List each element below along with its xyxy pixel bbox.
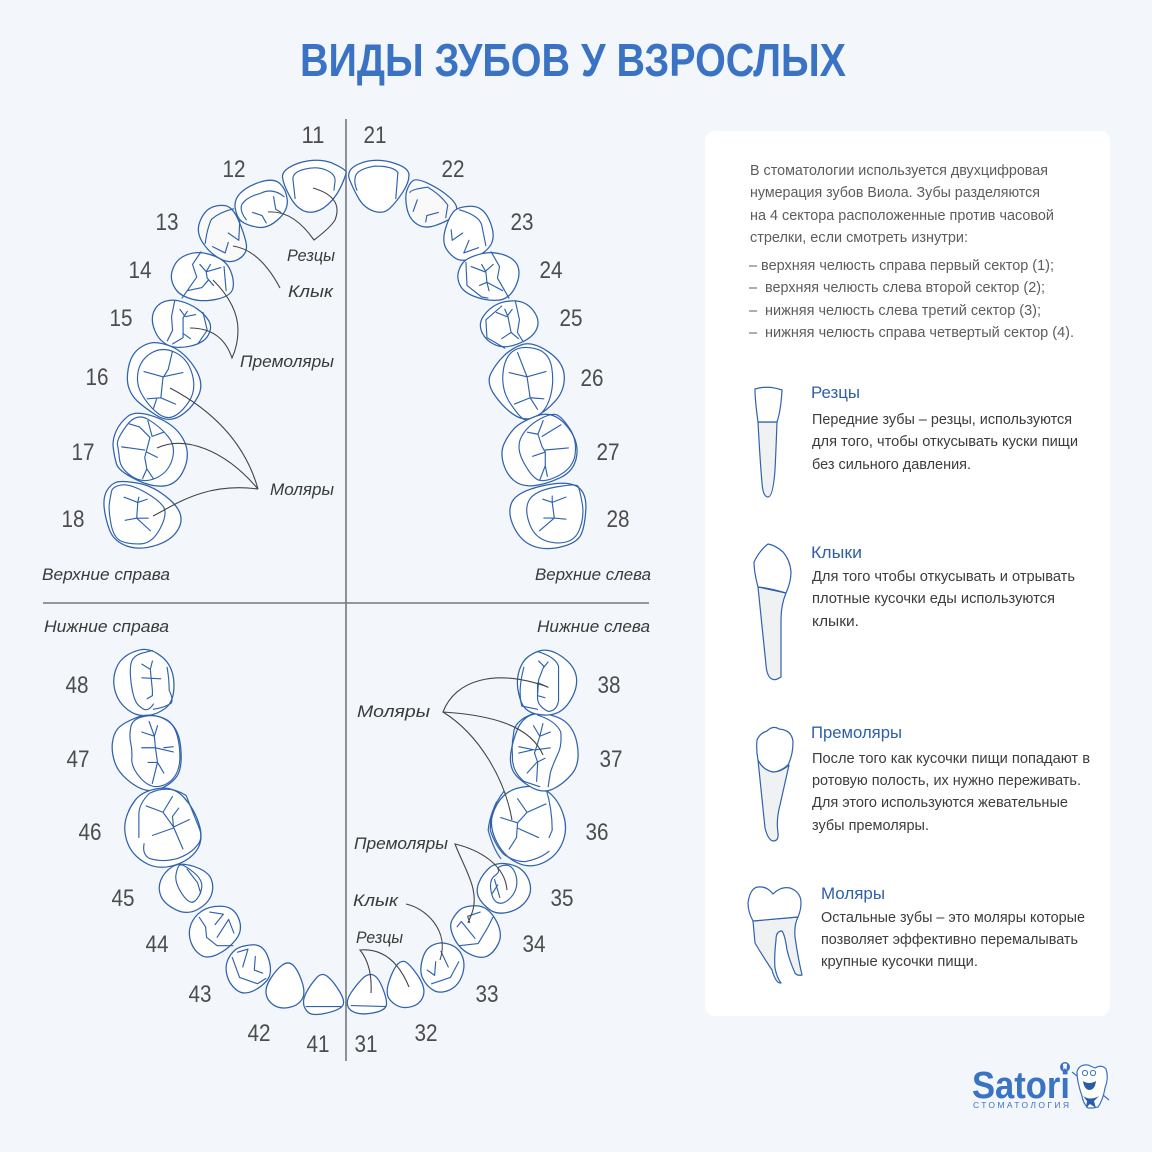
intro paragraph: стрелки, если смотреть изнутри: (750, 230, 968, 246)
handwritten labels (42, 246, 651, 947)
intro paragraph: на 4 сектора расположенные против часовой (750, 208, 1054, 224)
tooth 33 (421, 943, 464, 992)
icon: incisor (755, 387, 782, 497)
tooth 41 (303, 975, 344, 1014)
intro paragraph (750, 163, 1054, 246)
number 17: 17 (72, 439, 94, 466)
intro paragraph: В стоматологии используется двухцифровая (750, 163, 1048, 179)
leader: клык (233, 246, 280, 288)
number 22: 22 (442, 156, 464, 183)
tooth 36 (488, 786, 566, 866)
number 16: 16 (86, 364, 108, 391)
icon: small tooth badge (1060, 1062, 1070, 1072)
title: ВИДЫ ЗУБОВ У ВЗРОСЛЫХ (300, 34, 846, 86)
text: премоляры: После того как кусочки пищи попадают в (812, 751, 1090, 767)
tooth 28 (510, 483, 586, 549)
tooth 38 (517, 650, 577, 715)
label: верхние слева: Верхние слева (535, 565, 651, 584)
tooth 15 (152, 300, 211, 347)
number 14: 14 (128, 257, 152, 284)
sector list: – (749, 325, 758, 341)
sector list: нижняя челюсть слева третий сектор (3); (765, 303, 1041, 319)
tooth 35 (477, 864, 531, 913)
tooth 23 (444, 206, 493, 260)
number 37: 37 (600, 746, 622, 773)
leader: премоляры (455, 844, 507, 923)
text: моляры: позволяет эффективно перемалывать (821, 932, 1078, 948)
tooth 45 (159, 864, 213, 912)
tooth number labels (62, 122, 630, 1058)
text: клыки (812, 569, 1075, 630)
number 35: 35 (550, 885, 574, 912)
number 23: 23 (510, 209, 534, 236)
label: клык lower: Клык (353, 891, 399, 910)
tooth 18 (104, 482, 181, 548)
leader: премоляры (190, 280, 238, 358)
tooth 37 (510, 713, 578, 791)
dental chart: lower left quadrant teeth (347, 650, 578, 1014)
text: моляры: крупные кусочки пищи. (821, 954, 978, 970)
text: премоляры: зубы премоляры. (812, 818, 929, 834)
number 31: 31 (354, 1031, 378, 1058)
tooth 11 (282, 160, 346, 212)
label: резцы upper: Резцы (287, 246, 335, 265)
number 18: 18 (62, 506, 84, 533)
number 15: 15 (110, 305, 132, 332)
sector list (749, 258, 1074, 341)
number 48: 48 (66, 672, 88, 699)
sector list: – (749, 303, 758, 319)
tooth 44 (189, 906, 240, 957)
tooth 43 (226, 945, 270, 993)
tooth 34 (451, 906, 500, 957)
icon: canine (754, 544, 791, 680)
text: клыки: клыки. (812, 614, 859, 630)
number 11: 11 (302, 122, 324, 149)
number 12: 12 (222, 156, 246, 183)
text: премоляры: ротовую полость, их нужно переживать. (812, 773, 1081, 789)
panel: description (705, 131, 1110, 1016)
text: моляры: Остальные зубы – это моляры которые (821, 910, 1085, 926)
number 21: 21 (364, 122, 386, 149)
number 24: 24 (540, 257, 562, 284)
number 36: 36 (586, 819, 608, 846)
tooth 24 (458, 252, 519, 300)
text: премоляры (812, 751, 1090, 834)
text: резцы: без сильного давления. (812, 457, 971, 473)
text: резцы: Передние зубы – резцы, используются (812, 412, 1072, 428)
leader: клык (406, 904, 442, 960)
number 28: 28 (606, 506, 630, 533)
number 13: 13 (156, 209, 178, 236)
intro paragraph: нумерация зубов Виола. Зубы разделяются (750, 185, 1040, 201)
number 45: 45 (112, 885, 134, 912)
tooth 17 (113, 413, 187, 486)
number 42: 42 (248, 1020, 270, 1047)
tooth 27 (502, 414, 577, 486)
number 25: 25 (560, 305, 582, 332)
sector list: – (749, 280, 758, 296)
tooth 32 (387, 961, 424, 1008)
leader lines: upper right labels (153, 188, 337, 516)
label: нижние слева: Нижние слева (537, 617, 650, 636)
label: клык upper: Клык (288, 282, 334, 301)
number 38: 38 (598, 672, 620, 699)
number 47: 47 (66, 746, 90, 773)
number 41: 41 (306, 1031, 330, 1058)
tooth 16 (127, 343, 201, 419)
tooth 13 (198, 205, 247, 262)
leader: моляры (153, 388, 258, 516)
icon: premolar (757, 727, 793, 841)
logo: Satori (972, 1062, 1109, 1110)
number 27: 27 (596, 439, 620, 466)
tooth 14 (171, 252, 233, 301)
dental chart: upper right quadrant teeth (104, 160, 346, 548)
label: премоляры lower: Премоляры (354, 834, 448, 853)
number 34: 34 (522, 931, 546, 958)
text: клыки: Для того чтобы откусывать и отрывать (812, 569, 1075, 585)
tooth 48 (114, 649, 174, 716)
heading: клыки: Клыки (811, 543, 862, 562)
heading: моляры: Моляры (821, 884, 885, 903)
label: нижние справа: Нижние справа (44, 617, 169, 636)
number 32: 32 (414, 1020, 438, 1047)
tooth 42 (266, 963, 304, 1008)
leader: моляры (443, 678, 548, 820)
tooth 12 (235, 180, 287, 227)
logo wordmark: Satori (972, 1065, 1070, 1107)
sector list: нижняя челюсть справа четвертый сектор (4). (765, 325, 1074, 341)
tooth 25 (480, 301, 538, 348)
text: моляры (821, 910, 1085, 970)
text: клыки: плотные кусочки еды используются (812, 591, 1055, 607)
label: резцы lower: Резцы (356, 928, 403, 947)
sector list: верхняя челюсть слева второй сектор (2); (765, 280, 1045, 296)
tooth 47 (112, 715, 181, 791)
tooth 22 (406, 180, 457, 227)
label: премоляры upper: Премоляры (240, 352, 334, 371)
tooth 46 (125, 788, 201, 867)
label: моляры upper: Моляры (270, 480, 334, 499)
logo subtitle: СТОМАТОЛОГИЯ (973, 1100, 1069, 1110)
leader lines: lower left labels (360, 678, 548, 993)
dental chart: upper left quadrant teeth (349, 160, 586, 549)
text: резцы: для того, чтобы откусывать куски пищи (812, 434, 1078, 450)
label: моляры lower: Моляры (357, 702, 431, 721)
number 46: 46 (78, 819, 102, 846)
number 43: 43 (188, 981, 212, 1008)
heading: резцы: Резцы (811, 383, 860, 402)
icon: molar (748, 887, 802, 983)
number 44: 44 (146, 931, 168, 958)
label: верхние справа: Верхние справа (42, 565, 170, 584)
number 33: 33 (476, 981, 498, 1008)
text: премоляры: Для этого используются жевательные (812, 795, 1068, 811)
heading: премоляры: Премоляры (811, 723, 902, 742)
sector list: – верхняя челюсть справа первый сектор (1); (749, 258, 1054, 274)
icon: tooth mascot (1072, 1065, 1109, 1108)
tooth 26 (489, 344, 564, 420)
text: резцы (812, 412, 1078, 473)
number 26: 26 (580, 365, 604, 392)
leader: резцы (360, 950, 409, 993)
dental chart: lower right quadrant teeth (112, 649, 344, 1014)
tooth 31 (347, 975, 387, 1014)
leader: резцы (268, 188, 337, 240)
tooth 21 (349, 160, 409, 212)
